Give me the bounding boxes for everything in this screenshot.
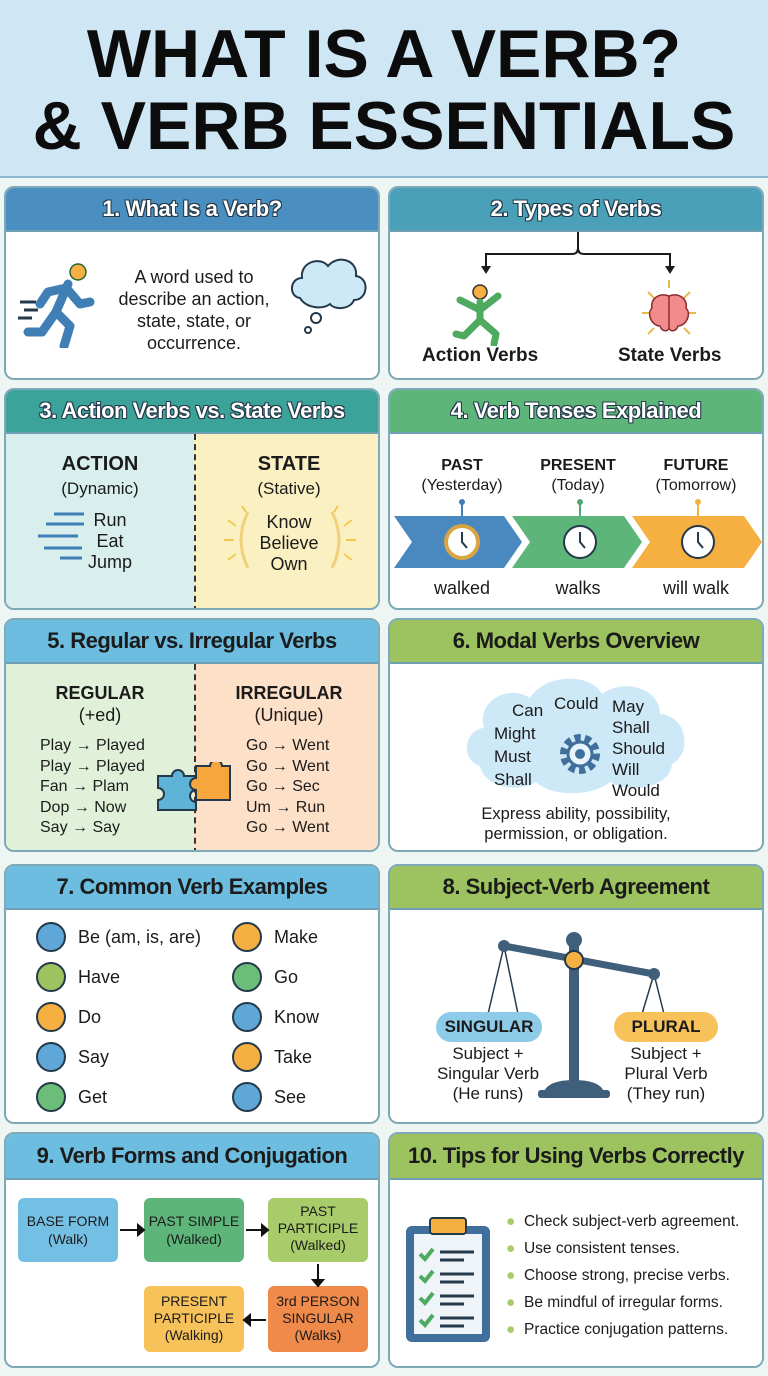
panel 9: verb forms: (Walked)	[166, 1231, 222, 1247]
verb list left: Have	[78, 967, 120, 987]
action side: Run	[93, 510, 127, 530]
tips list: ● Use consistent tenses.	[506, 1240, 680, 1257]
panel 5: regular vs irregular	[4, 618, 380, 852]
flow boxes: BASE FORM	[27, 1213, 109, 1229]
verb list right: See	[274, 1086, 306, 1106]
icon: puzzle pieces	[157, 762, 231, 811]
panel 2: types of verbs	[388, 186, 764, 380]
regular side: REGULAR	[56, 683, 144, 703]
heading 8: 8. Subject-Verb Agreement	[443, 874, 709, 899]
label: action verbs: Action Verbs	[422, 345, 538, 366]
verb list left: Do	[78, 1007, 101, 1027]
irregular side	[194, 664, 382, 854]
title	[33, 16, 735, 164]
heading 1: 1. What Is a Verb?	[102, 196, 282, 221]
panel 3: action vs state	[4, 388, 380, 610]
panel 6: modal verbs: Might	[494, 724, 536, 743]
irregular side: Go → Sec	[246, 778, 320, 795]
heading 5	[6, 620, 378, 664]
verb list left: Be (am, is, are)	[78, 927, 201, 947]
panel 9: verb forms: (Walks)	[295, 1327, 341, 1343]
panel 9: verb forms: PAST SIMPLE	[149, 1213, 239, 1229]
verb list right	[232, 922, 319, 1112]
heading 7: 7. Common Verb Examples	[57, 874, 327, 899]
irregular side: Go → Went	[246, 737, 329, 754]
panel 4: verb tenses: PRESENT	[540, 457, 616, 474]
panel 9: verb forms: PARTICIPLE	[278, 1220, 358, 1236]
icon: balance scale	[488, 932, 664, 1098]
verb list right: Know	[274, 1006, 319, 1026]
irregular side: IRREGULAR	[236, 683, 342, 703]
panel 1: what is a verb	[4, 186, 380, 380]
verb list left: Get	[78, 1087, 107, 1107]
panel 4: verb tenses: (Tomorrow)	[656, 477, 736, 494]
panel 7: common verbs	[4, 864, 380, 1124]
heading 5: 5. Regular vs. Irregular Verbs	[47, 628, 337, 653]
action side: Jump	[88, 552, 132, 572]
tense labels: (Yesterday)	[421, 477, 503, 494]
tips list: ● Be mindful of irregular forms.	[506, 1294, 723, 1311]
panel 4: verb tenses: will walk	[663, 578, 729, 598]
verb list left: Say	[78, 1047, 109, 1067]
panel 4: verb tenses: walks	[555, 578, 600, 598]
caption	[481, 805, 671, 843]
panel 6: modal verbs: Shall	[612, 718, 650, 737]
heading 9: 9. Verb Forms and Conjugation	[37, 1143, 347, 1168]
heading 4	[390, 390, 762, 434]
verb list right: Make	[274, 926, 318, 946]
panel 9: verb forms: (Walked)	[290, 1237, 346, 1253]
state side: STATE	[258, 453, 320, 475]
arrow: branching	[481, 232, 675, 274]
title: WHAT IS A VERB?	[87, 16, 681, 92]
panel 6: modal verbs: Would	[612, 781, 660, 800]
action side: (Dynamic)	[61, 479, 139, 498]
panel 10: tips	[388, 1132, 764, 1368]
panel 6: modal verbs: Will	[612, 760, 639, 779]
state side: Know	[266, 512, 312, 532]
verb list right: Take	[274, 1046, 312, 1066]
title band	[0, 0, 768, 178]
icon: sun rays	[224, 506, 356, 568]
heading 2: 2. Types of Verbs	[491, 196, 661, 221]
verb list left	[36, 922, 201, 1112]
icon: jumping person	[452, 284, 502, 346]
action side: ACTION	[62, 453, 138, 475]
irregular side: (Unique)	[254, 705, 324, 725]
caption: Express ability, possibility,	[481, 805, 671, 823]
tips list: ● Check subject-verb agreement.	[506, 1213, 739, 1230]
heading 10: 10. Tips for Using Verbs Correctly	[408, 1143, 744, 1168]
panel 8: subject-verb agreement: (They run)	[627, 1084, 705, 1103]
icon: brain	[642, 280, 696, 335]
heading 6: 6. Modal Verbs Overview	[453, 628, 699, 653]
regular side: (+ed)	[79, 705, 121, 725]
tips list: ● Practice conjugation patterns.	[506, 1321, 728, 1338]
irregular side: Go → Went	[246, 758, 329, 774]
icon: thought cloud	[290, 258, 367, 334]
tips list: ● Choose strong, precise verbs.	[506, 1267, 730, 1284]
heading 7	[6, 866, 378, 910]
state side: Believe	[259, 533, 319, 553]
plural label	[614, 1012, 718, 1042]
panel 4: verb tenses: (Today)	[551, 477, 605, 494]
panel 6: modal verbs: Shall	[494, 770, 532, 789]
panel 9: verb forms	[4, 1132, 380, 1368]
panel 8: subject-verb agreement: (He runs)	[453, 1084, 523, 1103]
singular label	[436, 1012, 542, 1042]
panel 9: verb forms: PRESENT	[161, 1293, 227, 1309]
icon: clipboard checklist	[406, 1217, 490, 1342]
definition text: A word used to describe an action, state, state, or occurrence.	[118, 267, 270, 353]
label: state verbs: State Verbs	[618, 345, 722, 366]
panel 4: verb tenses	[388, 388, 764, 610]
heading 6	[390, 620, 762, 664]
panel 6: modal verbs: Could	[554, 694, 598, 713]
state side: Own	[270, 554, 308, 574]
heading 9	[6, 1134, 378, 1180]
tense labels	[421, 457, 503, 494]
panel 8: subject-verb agreement: Subject +	[452, 1044, 524, 1063]
verb list right: Go	[274, 966, 298, 986]
state side: (Stative)	[257, 479, 321, 498]
cloud of modal verbs	[466, 678, 684, 794]
heading 4: 4. Verb Tenses Explained	[451, 398, 701, 423]
action side	[6, 434, 194, 612]
tense examples: walked	[434, 578, 490, 598]
icon: speed lines	[38, 512, 84, 560]
heading 1	[6, 188, 378, 232]
plural label: PLURAL	[632, 1017, 700, 1036]
panel 8: subject-verb agreement: Singular Verb	[437, 1064, 539, 1083]
regular side: Say → Say	[40, 819, 120, 836]
heading 2	[390, 188, 762, 232]
panel 6: modal verbs	[388, 618, 764, 852]
heading 3: 3. Action Verbs vs. State Verbs	[39, 398, 345, 423]
panel 6: modal verbs: May	[612, 697, 644, 716]
regular side: Dop → Now	[40, 798, 126, 816]
timeline chevrons with clocks	[394, 499, 762, 568]
panel 4: verb tenses: FUTURE	[664, 457, 728, 474]
flow boxes: (Walk)	[48, 1231, 88, 1247]
panel 6: modal verbs: Can	[512, 701, 543, 720]
heading 10	[390, 1134, 762, 1180]
irregular side: Go → Went	[246, 819, 329, 836]
heading 8	[390, 866, 762, 910]
panel 9: verb forms: PARTICIPLE	[154, 1310, 234, 1326]
icon: running person	[18, 263, 94, 348]
caption: permission, or obligation.	[484, 825, 668, 843]
panel 6: modal verbs: Must	[494, 747, 531, 766]
panel 8: subject-verb agreement: Subject +	[630, 1044, 702, 1063]
arrows	[120, 1222, 326, 1328]
panel 6: modal verbs: Should	[612, 739, 665, 758]
panel 9: verb forms: (Walking)	[165, 1327, 223, 1343]
panel 8: subject-verb agreement: Plural Verb	[624, 1064, 708, 1083]
regular side: Play → Played	[40, 758, 145, 774]
title: & VERB ESSENTIALS	[33, 88, 735, 164]
tips list	[506, 1213, 739, 1338]
irregular side: Um → Run	[246, 798, 325, 816]
regular side: Play → Played	[40, 737, 145, 754]
flow boxes	[18, 1198, 118, 1262]
panel 9: verb forms: PAST	[300, 1203, 336, 1219]
tense labels: PAST	[441, 457, 483, 474]
state side	[194, 434, 382, 612]
regular side	[6, 664, 194, 854]
singular label: SINGULAR	[445, 1017, 533, 1036]
panel 8: subject-verb agreement	[388, 864, 764, 1124]
panel 9: verb forms: 3rd PERSON	[276, 1293, 360, 1309]
action side: Eat	[96, 531, 124, 551]
regular side: Fan → Plam	[40, 778, 129, 795]
panel 9: verb forms: SINGULAR	[282, 1310, 354, 1326]
heading 3	[6, 390, 378, 434]
